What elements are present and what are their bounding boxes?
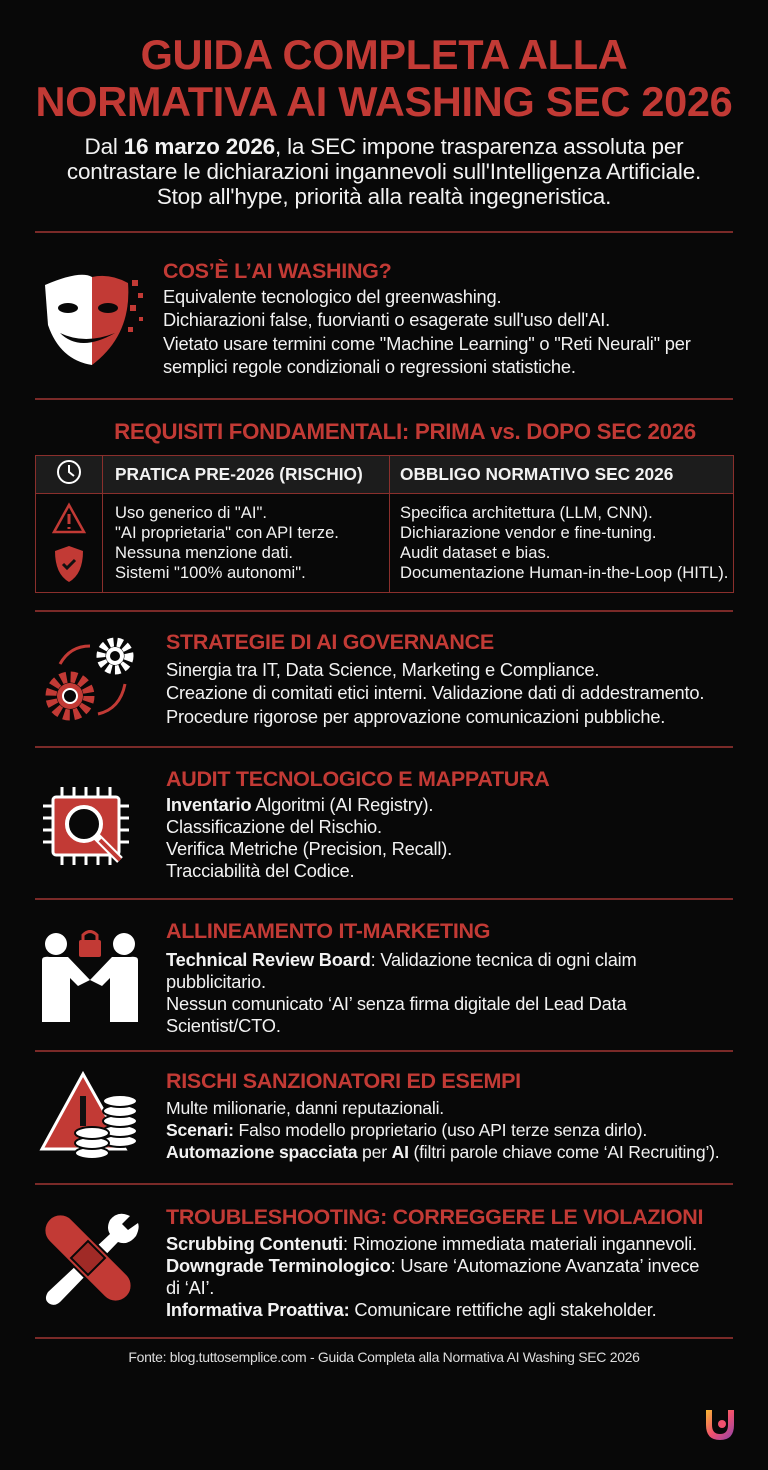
table: prima vs dopo: Audit dataset e bias. <box>400 543 550 562</box>
text: Procedure rigorose per approvazione comunicazioni pubbliche. <box>166 706 665 727</box>
title: NORMATIVA AI WASHING SEC 2026 <box>36 78 732 125</box>
icon: gears <box>46 638 134 720</box>
section: allineamento <box>42 919 637 1036</box>
subtitle <box>67 134 701 209</box>
icon: handshake with lock <box>42 930 138 1022</box>
icon: mask <box>45 274 143 365</box>
logo <box>706 1410 734 1440</box>
table: prima vs dopo: Dichiarazione vendor e fine-tuning. <box>400 523 656 542</box>
text: Downgrade Terminologico: Usare ‘Automazione Avanzata’ invece <box>166 1255 699 1276</box>
table: prima vs dopo: "AI proprietaria" con API terze. <box>115 523 339 542</box>
text: Vietato usare termini come "Machine Learning" o "Reti Neurali" per <box>163 333 691 354</box>
table: prima vs dopo <box>35 455 734 593</box>
text: Scientist/CTO. <box>166 1015 281 1036</box>
title: GUIDA COMPLETA ALLA <box>141 31 627 78</box>
heading: TROUBLESHOOTING: CORREGGERE LE VIOLAZIONI <box>166 1205 703 1229</box>
section: governance <box>46 630 704 727</box>
text: Inventario Algoritmi (AI Registry). <box>166 794 433 815</box>
text: Nessun comunicato ‘AI’ senza firma digitale del Lead Data <box>166 993 626 1014</box>
heading: COS’È L’AI WASHING? <box>163 259 391 283</box>
text <box>163 286 691 377</box>
table: prima vs dopo: OBBLIGO NORMATIVO SEC 2026 <box>400 464 673 484</box>
section: cos'è l'AI washing <box>45 259 691 377</box>
subtitle: Stop all'hype, priorità alla realtà ingegneristica. <box>157 184 611 209</box>
text: Equivalente tecnologico del greenwashing. <box>163 286 501 307</box>
heading: RISCHI SANZIONATORI ED ESEMPI <box>166 1069 521 1093</box>
text: Scenari: Falso modello proprietario (uso API terze senza dirlo). <box>166 1120 647 1140</box>
text <box>166 794 452 881</box>
text <box>166 949 637 1036</box>
title <box>36 31 732 125</box>
text: Automazione spacciata per AI (filtri parole chiave come ‘AI Recruiting’). <box>166 1142 720 1162</box>
text: Informativa Proattiva: Comunicare rettifiche agli stakeholder. <box>166 1299 657 1320</box>
table: prima vs dopo: Specifica architettura (LLM, CNN). <box>400 503 653 522</box>
icon: clock <box>57 460 81 484</box>
heading: STRATEGIE DI AI GOVERNANCE <box>166 630 494 654</box>
text <box>166 659 704 727</box>
icon: chip with magnifier <box>43 787 129 865</box>
text: pubblicitario. <box>166 971 266 992</box>
text: Multe milionarie, danni reputazionali. <box>166 1098 444 1118</box>
text: Classificazione del Rischio. <box>166 816 382 837</box>
table: prima vs dopo: PRATICA PRE-2026 (RISCHIO) <box>115 464 363 484</box>
section: rischi <box>40 1069 720 1162</box>
section: troubleshooting <box>45 1205 703 1320</box>
text <box>166 1233 699 1320</box>
table: prima vs dopo: Documentazione Human-in-the-Loop (HITL). <box>400 563 728 582</box>
subtitle: Dal 16 marzo 2026, la SEC impone trasparenza assoluta per <box>85 134 683 159</box>
text: Technical Review Board: Validazione tecnica di ogni claim <box>166 949 637 970</box>
icon: bandage and wrench <box>45 1214 139 1305</box>
footer source: Fonte: blog.tuttosemplice.com - Guida Completa alla Normativa AI Washing SEC 2026 <box>128 1349 640 1365</box>
text: semplici regole condizionali o regressioni statistiche. <box>163 356 576 377</box>
subtitle: contrastare le dichiarazioni ingannevoli sull'Intelligenza Artificiale. <box>67 159 701 184</box>
text: Scrubbing Contenuti: Rimozione immediata materiali ingannevoli. <box>166 1233 697 1254</box>
icon: warning with coins <box>40 1071 136 1158</box>
section: audit <box>43 767 550 881</box>
text <box>166 1098 720 1162</box>
text: Creazione di comitati etici interni. Validazione dati di addestramento. <box>166 682 704 703</box>
text: Verifica Metriche (Precision, Recall). <box>166 838 452 859</box>
heading: AUDIT TECNOLOGICO E MAPPATURA <box>166 767 549 791</box>
table: prima vs dopo: Sistemi "100% autonomi". <box>115 563 306 582</box>
text: Tracciabilità del Codice. <box>166 860 354 881</box>
table: prima vs dopo: Uso generico di "AI". <box>115 503 267 522</box>
text: Sinergia tra IT, Data Science, Marketing e Compliance. <box>166 659 599 680</box>
table: prima vs dopo: Nessuna menzione dati. <box>115 543 293 562</box>
heading: ALLINEAMENTO IT-MARKETING <box>166 919 490 943</box>
text: Dichiarazioni false, fuorvianti o esagerate sull'uso dell'AI. <box>163 309 610 330</box>
section: requisiti heading: REQUISITI FONDAMENTALI: PRIMA vs. DOPO SEC 2026 <box>114 419 696 444</box>
text: di ‘AI’. <box>166 1277 214 1298</box>
